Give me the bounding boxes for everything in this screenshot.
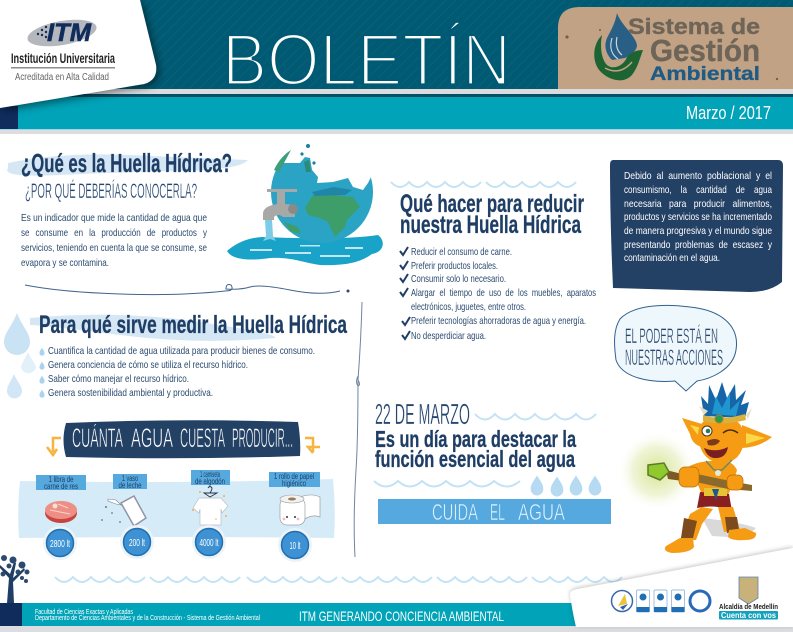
heading: día del agua: Es un día para destacar la xyxy=(375,426,576,452)
checklist: Preferir productos locales. xyxy=(411,260,498,272)
text block: definition: servicios, teniendo en cuenta la que se consume, se xyxy=(21,242,207,254)
logo: ITM xyxy=(0,0,156,108)
list: para qué sirve: Saber cómo manejar el recurso hídrico. xyxy=(48,373,189,385)
panel: certification logos xyxy=(570,548,793,627)
text block: definition: evapora y se contamina. xyxy=(21,257,109,269)
value: 200 lt xyxy=(120,525,154,559)
panel: kraft logo Sistema de Gestión Ambiental: Ambiental xyxy=(650,64,760,85)
value: 4000 lt: 4000 lt xyxy=(200,538,219,549)
arrow: right xyxy=(305,438,320,453)
heading: día del agua xyxy=(375,426,576,472)
list: para qué sirve xyxy=(39,345,315,399)
footer bar: Facultad de Ciencias Exactas y Aplicadas xyxy=(35,609,133,616)
date: Marzo / 2017 xyxy=(686,103,771,123)
banner: cuánta agua cuesta producir: AGUA xyxy=(131,423,173,453)
checklist: Reducir el consumo de carne. xyxy=(411,246,512,258)
value: 10 lt xyxy=(278,528,312,562)
panel: kraft logo Sistema de Gestión Ambiental: Sistema de xyxy=(628,14,760,39)
icon: toilet paper xyxy=(280,495,320,525)
list: para qué sirve: Cuantifica la cantidad de agua utilizada para producir bienes de consumo. xyxy=(48,345,315,357)
value: 200 lt: 200 lt xyxy=(129,538,145,549)
label: carne: 1 libra de xyxy=(48,474,74,484)
label: leche xyxy=(113,473,147,490)
text: ¿POR QUÉ DEBERÍAS CONOCERLA? xyxy=(25,180,197,203)
checklist: Alargar el tiempo de uso de los muebles, aparatos xyxy=(411,287,596,299)
list: para qué sirve: Genera sostenibilidad ambiental y productiva. xyxy=(48,387,213,399)
list: para qué sirve: Genera conciencia de cómo se utiliza el recurso hídrico. xyxy=(48,359,248,371)
icon: t-shirt xyxy=(192,486,228,529)
icon: meat xyxy=(45,501,77,523)
banner: cuánta agua cuesta producir xyxy=(64,420,300,458)
label: camiseta: 1 camiseta xyxy=(200,469,220,479)
heading: día del agua: función esencial del agua xyxy=(375,446,575,472)
wave decoration bottom xyxy=(55,577,622,582)
wave decoration: qué hacer xyxy=(391,182,576,187)
heading: Qué es la Huella Hídrica: ¿Qué es la Huella Hídrica? xyxy=(21,148,232,178)
divider: vertical xyxy=(354,302,362,557)
header band xyxy=(0,0,793,134)
label: leche: 1 vaso xyxy=(122,473,138,483)
heading: Para qué sirve: Para qué sirve medir la Huella Hídrica xyxy=(39,311,348,339)
text block: definition: Es un indicador que mide la cantidad de agua que xyxy=(21,212,207,224)
text block: definition: se consume en la producción de productos y xyxy=(21,227,208,239)
label: camiseta xyxy=(191,469,230,486)
checklist: electrónicos, juguetes, entre otros. xyxy=(411,301,526,313)
banner: cuida el agua: AGUA xyxy=(518,499,565,525)
heading: qué hacer xyxy=(400,190,584,239)
speech bubble xyxy=(615,305,737,391)
value: 4000 lt xyxy=(192,525,226,559)
banner: cuida el agua: EL xyxy=(490,499,505,525)
heading: Qué es la Huella Hídrica xyxy=(7,148,248,178)
wave decoration: marzo xyxy=(475,414,596,420)
label: leche: de leche xyxy=(118,480,142,490)
panel: certification logos: Cuenta con vos xyxy=(721,611,776,620)
panel: kraft logo Sistema de Gestión Ambiental xyxy=(558,7,793,89)
checklist xyxy=(400,246,596,342)
footer bar: ITM GENERANDO CONCIENCIA AMBIENTAL xyxy=(299,608,504,624)
logo: ITM: Acreditada en Alta Calidad xyxy=(15,72,109,83)
value: 10 lt: 10 lt xyxy=(290,541,301,552)
text block: definition xyxy=(21,212,208,269)
value: 2800 lt xyxy=(43,526,77,560)
label: camiseta: de algodón xyxy=(195,476,225,486)
panel: kraft logo Sistema de Gestión Ambiental: Gestión xyxy=(650,33,760,68)
icon: water drops xyxy=(4,313,36,398)
panel: water cost chart xyxy=(18,469,335,562)
label: carne: carne de res xyxy=(44,481,78,491)
label: papel xyxy=(269,471,320,488)
heading: qué hacer: nuestra Huella Hídrica xyxy=(400,211,582,239)
banner: cuánta agua cuesta producir: CUESTA xyxy=(180,423,225,453)
divider: wavy line xyxy=(25,284,340,295)
illustration: mascot xyxy=(617,382,772,553)
banner: cuánta agua cuesta producir: CUÁNTA xyxy=(72,423,123,453)
footer bar xyxy=(0,603,793,632)
text: PRODUCIR... xyxy=(232,423,293,453)
panel: certification logos: Alcaldía de Medellín xyxy=(719,602,778,611)
checklist: Preferir tecnologías ahorradoras de agua y energía. xyxy=(411,315,586,327)
logo: ITM: ITM xyxy=(47,19,92,47)
value: 2800 lt: 2800 lt xyxy=(50,539,70,550)
logo: ITM: Institución Universitaria xyxy=(11,50,115,66)
banner: cuida el agua: CUIDA xyxy=(432,499,478,525)
checklist: No desperdiciar agua. xyxy=(411,330,486,342)
arrow: left xyxy=(47,438,61,455)
icon: globe with faucet and puddle xyxy=(227,136,383,265)
panel: callout consumismo: contaminación en el agua. xyxy=(624,252,720,264)
footer bar: Departamento de Ciencias Ambientales y de la Construcción - Sistema de Gestión Ambiental xyxy=(35,615,260,622)
banner: cuida el agua xyxy=(378,499,611,525)
panel: callout consumismo xyxy=(610,160,783,292)
icon: glass of milk xyxy=(101,496,146,526)
label: papel: 1 rollo de papel xyxy=(274,471,314,481)
icons: water drops row xyxy=(531,476,601,496)
title: BOLETÍN xyxy=(222,20,511,101)
checklist: Consumir solo lo necesario. xyxy=(411,273,506,285)
wave decoration: día del agua xyxy=(374,481,520,486)
text: 22 DE MARZO xyxy=(375,399,470,431)
heading: Para qué sirve xyxy=(30,311,348,341)
heading: qué hacer: Qué hacer para reducir xyxy=(400,190,584,218)
icon: tree xyxy=(0,555,30,603)
label: papel: higiénico xyxy=(282,478,306,488)
label: carne xyxy=(36,474,86,491)
